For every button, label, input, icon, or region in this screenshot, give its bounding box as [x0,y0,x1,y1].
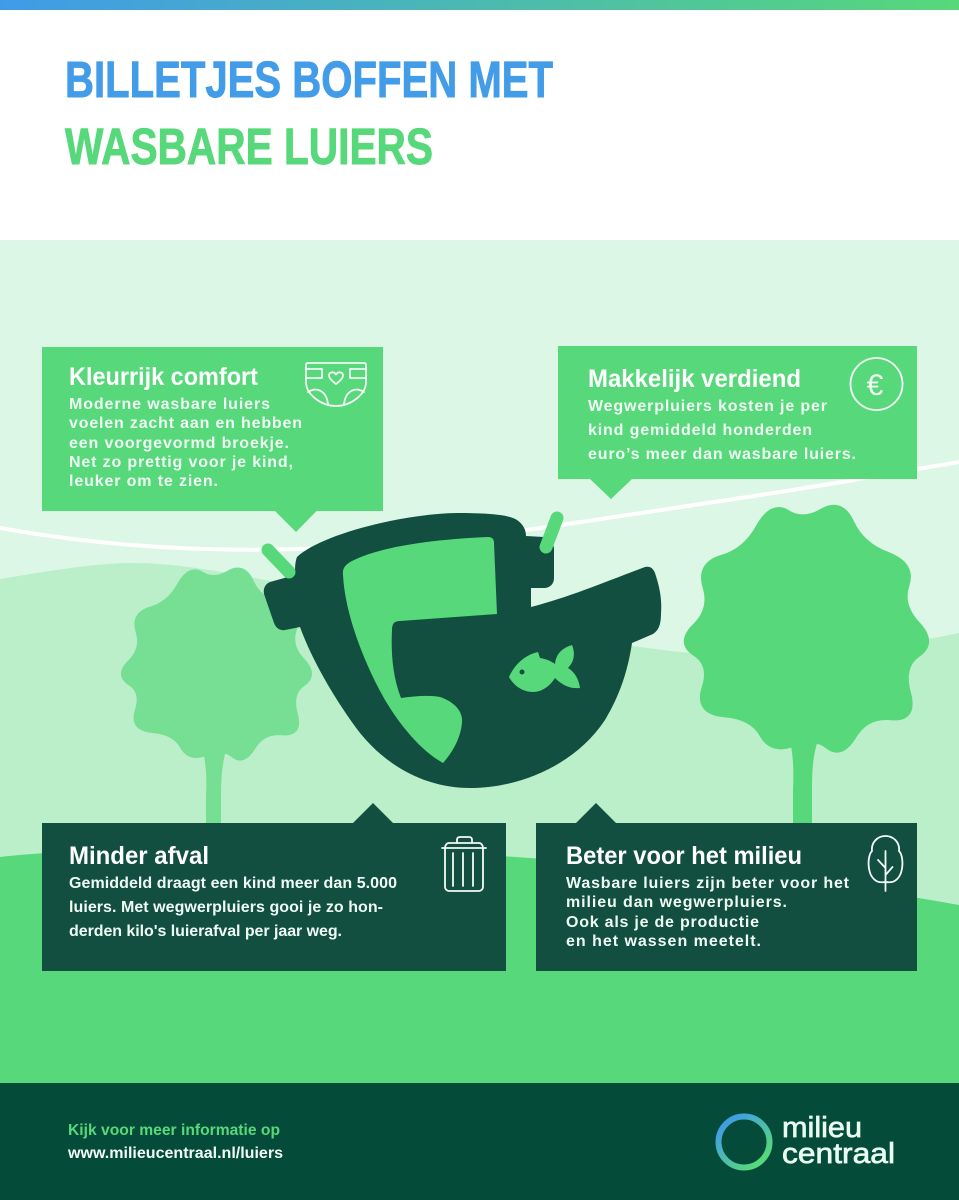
body text: euro’s meer dan wasbare luiers. [588,446,856,463]
panel: kleurrijk comfort [42,347,383,532]
title [65,51,553,175]
body text: derden kilo's luierafval per jaar weg. [69,923,342,940]
title: BILLETJES BOFFEN MET [65,51,553,108]
panel: minder afval [42,803,506,971]
left clip [268,550,289,572]
body text: Ook als je de productie [566,914,759,931]
body text: voelen zacht aan en hebben [69,415,302,432]
body text [566,875,850,950]
heading: Kleurrijk comfort [69,363,259,391]
logo: milieu centraal: milieu [782,1112,862,1144]
icon: euro [850,358,902,410]
body text [69,396,302,490]
heading: Minder afval [69,842,209,870]
footer link text: Kijk voor meer informatie op [68,1122,280,1139]
footer [0,1083,959,1200]
body text [588,398,856,463]
heading: Makkelijk verdiend [588,365,801,393]
fish [509,645,580,692]
body text: Net zo prettig voor je kind, [69,454,293,471]
logo: milieu centraal [718,1112,895,1170]
icon: tree [869,836,902,891]
footer link text [67,1122,283,1162]
logo: milieu centraal: centraal [782,1138,895,1170]
icon: diaper [306,363,366,406]
diaper inner lining [343,537,497,763]
left tree [123,570,310,823]
body text: Wegwerpluiers kosten je per [588,398,827,415]
heading: Beter voor het milieu [566,842,802,870]
body text: een voorgevormd broekje. [69,435,289,452]
panel: beter voor het milieu [536,803,917,971]
clothes line [0,462,959,550]
panel: makkelijk verdiend [558,346,917,499]
right clip [546,518,557,547]
body text: en het wassen meetelt. [566,933,761,950]
body text [69,875,397,940]
body text: Moderne wasbare luiers [69,396,270,413]
top gradient bar [0,0,959,10]
landscape background [0,240,959,1083]
body text: Gemiddeld draagt een kind meer dan 5.000 [69,875,397,892]
body text: Wasbare luiers zijn beter voor het [566,875,850,892]
diaper illustration [264,513,661,788]
body text: kind gemiddeld honderden [588,422,812,439]
body text: leuker om te zien. [69,473,218,490]
diaper body [264,513,661,788]
right tree [687,508,926,823]
body text: milieu dan wegwerpluiers. [566,894,787,911]
icon: trash can [442,837,486,891]
footer link text: www.milieucentraal.nl/luiers [67,1145,283,1162]
body text: luiers. Met wegwerpluiers gooi je zo hon- [69,899,383,916]
title: WASBARE LUIERS [65,118,433,175]
icon: euro: € [867,369,884,402]
